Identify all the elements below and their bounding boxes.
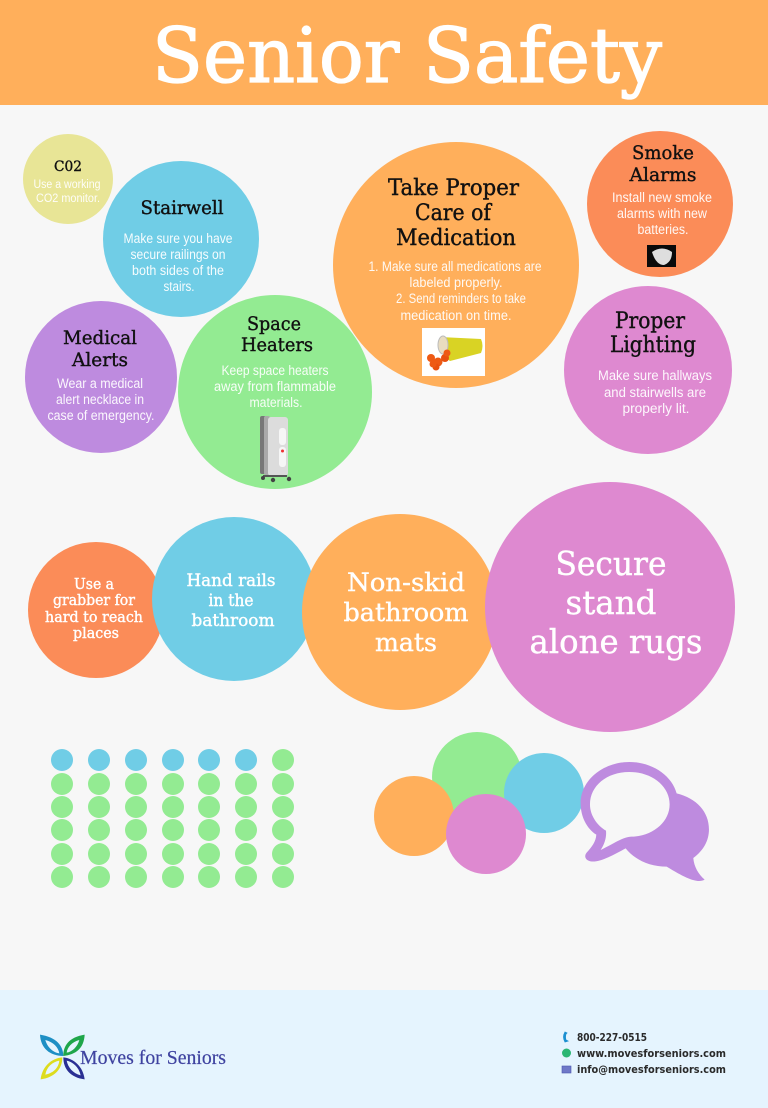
icon: envelope	[562, 1066, 571, 1073]
contact details: www.movesforseniors.com	[577, 1047, 726, 1060]
panel: medication: 2. Send reminders to take	[396, 291, 526, 306]
panel: space heaters: materials.	[250, 395, 302, 410]
panel: rugs tip: stand	[566, 583, 656, 622]
panel: proper lighting: properly lit.	[622, 401, 690, 416]
panel: stairwell	[103, 161, 259, 317]
icon: smoke detector	[647, 245, 676, 267]
panel: stairwell: both sides of the	[132, 263, 224, 278]
contact details: 800-227-0515	[577, 1031, 647, 1044]
contact details: info@movesforseniors.com	[577, 1063, 726, 1076]
contact details	[562, 1031, 726, 1076]
panel: hand rails tip: in the	[208, 591, 254, 611]
panel: hand rails tip: Hand rails	[186, 571, 276, 591]
panel: stairwell: secure railings on	[130, 247, 226, 262]
icon: speech bubbles	[581, 762, 709, 881]
panel: space heaters: away from flammable	[214, 379, 336, 394]
icon: phone	[564, 1032, 568, 1042]
panel: bath mats tip: bathroom	[344, 598, 469, 627]
panel: smoke alarms	[587, 131, 733, 277]
panel: smoke alarms: Smoke	[632, 142, 694, 164]
panel: medication: medication on time.	[400, 308, 512, 323]
panel: proper lighting: Lighting	[610, 333, 696, 358]
panel: bath mats tip	[302, 514, 498, 710]
icon: oil heater	[260, 416, 291, 482]
panel: medical alerts: Wear a medical	[57, 376, 143, 391]
dot grid	[51, 749, 294, 888]
panel: space heaters	[178, 295, 372, 489]
panel: rugs tip	[485, 482, 735, 732]
panel: stairwell: stairs.	[164, 279, 194, 294]
panel: grabber tip: hard to reach	[45, 610, 143, 626]
panel: rugs tip: alone rugs	[530, 622, 702, 661]
panel: medical alerts: alert necklace in	[56, 392, 144, 407]
panel: space heaters: Space	[247, 313, 301, 335]
footer	[0, 990, 768, 1108]
panel: medication: Care of	[415, 201, 493, 226]
panel: grabber tip	[28, 542, 164, 678]
panel: bath mats tip: Non-skid	[347, 568, 465, 597]
decorative circle cluster	[374, 732, 584, 874]
panel: CO2: C02	[54, 159, 82, 175]
panel: CO2: CO2 monitor.	[36, 193, 100, 205]
panel: bath mats tip: mats	[375, 628, 437, 657]
panel: proper lighting: Proper	[615, 309, 685, 334]
panel: CO2: Use a working	[34, 179, 100, 191]
panel: grabber tip: grabber for	[53, 593, 135, 609]
panel: medical alerts: Medical	[63, 327, 137, 349]
panel: hand rails tip	[152, 517, 316, 681]
panel: medication: Take Proper	[388, 176, 519, 201]
logo	[40, 1035, 226, 1079]
title: Senior Safety	[152, 11, 662, 100]
icon: spilled pills	[422, 328, 485, 376]
panel: rugs tip: Secure	[556, 544, 666, 583]
logo: Moves for Seniors	[80, 1047, 226, 1069]
panel: medication: 1. Make sure all medications are	[368, 259, 542, 274]
panel: smoke alarms: Alarms	[629, 164, 696, 186]
panel: stairwell: Stairwell	[140, 198, 224, 219]
panel: hand rails tip: bathroom	[192, 611, 274, 631]
panel: grabber tip: Use a	[74, 577, 114, 593]
panel: smoke alarms: alarms with new	[617, 206, 707, 221]
panel: stairwell: Make sure you have	[124, 231, 232, 246]
panel: medical alerts	[25, 301, 177, 453]
panel: medication: Medication	[396, 226, 516, 251]
panel: medication: labeled properly.	[410, 275, 502, 290]
panel: grabber tip: places	[73, 626, 119, 642]
panel: medical alerts: Alerts	[71, 349, 128, 371]
header banner	[0, 0, 768, 105]
panel: proper lighting	[564, 286, 732, 454]
panel: medical alerts: case of emergency.	[48, 408, 154, 423]
panel: proper lighting: and stairwells are	[604, 385, 706, 400]
panel: space heaters: Heaters	[241, 334, 313, 356]
icon: globe	[562, 1048, 571, 1058]
panel: CO2	[23, 134, 113, 224]
panel: smoke alarms: Install new smoke	[612, 190, 712, 205]
panel: medication	[333, 142, 579, 388]
panel: space heaters: Keep space heaters	[222, 363, 329, 378]
panel: smoke alarms: batteries.	[638, 222, 688, 237]
panel: proper lighting: Make sure hallways	[598, 368, 712, 383]
